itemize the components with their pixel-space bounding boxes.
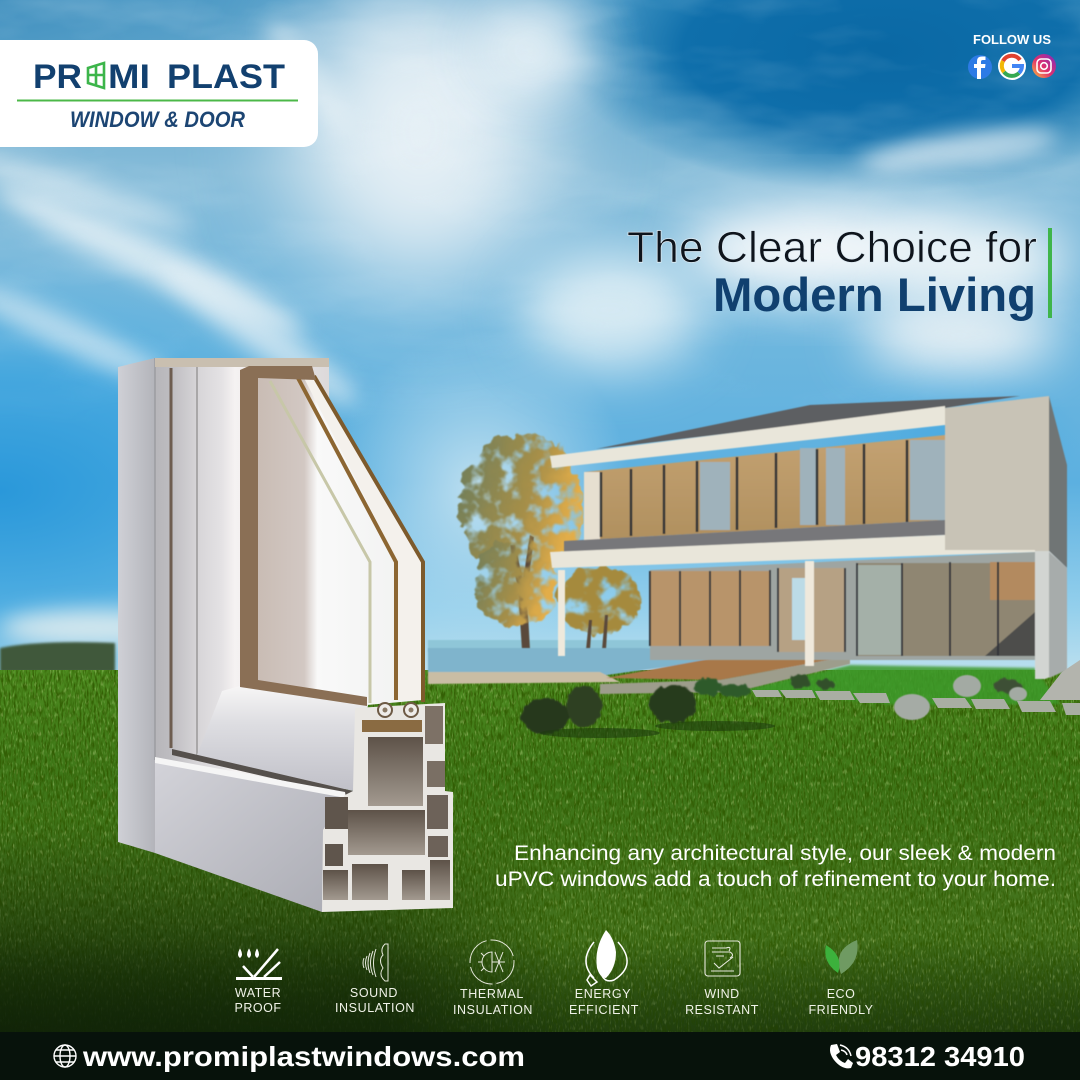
stone wall xyxy=(945,396,1049,551)
feature: eco friendly xyxy=(809,940,874,1017)
feature: thermal insulation: THERMAL xyxy=(460,987,524,1001)
social follow block xyxy=(968,33,1056,80)
columns xyxy=(558,561,814,666)
lower fascia xyxy=(550,535,1035,568)
pool and deck xyxy=(428,648,850,694)
main frame face xyxy=(155,358,345,795)
icon: instagram xyxy=(1032,54,1056,78)
glass panes xyxy=(258,376,423,705)
feature: wind resistant: WIND xyxy=(704,987,740,1001)
icon: sun and snowflake in circle xyxy=(470,940,514,984)
feature: sound insulation: SOUND xyxy=(350,986,398,1000)
sea horizon xyxy=(428,640,658,652)
icon: google xyxy=(998,52,1026,80)
tree behind house xyxy=(460,433,642,650)
feature: eco friendly: ECO xyxy=(827,987,855,1001)
feature: energy efficient xyxy=(569,930,639,1017)
icon: two green leaves xyxy=(825,940,858,974)
description text: uPVC windows add a touch of refinement to your home. xyxy=(495,867,1056,891)
icon: sound waves at wall xyxy=(363,944,388,981)
feature: water proof xyxy=(235,949,282,1015)
logo panel xyxy=(0,40,318,147)
garden shrubs and stepping stones xyxy=(521,660,1080,738)
sky background xyxy=(0,0,1080,690)
icon: globe xyxy=(54,1045,76,1067)
feature: energy efficient: ENERGY xyxy=(575,987,631,1001)
description text: Enhancing any architectural style, our sleek & modern xyxy=(514,841,1056,865)
description text xyxy=(495,841,1056,891)
brand name xyxy=(33,58,285,96)
green accent bar xyxy=(1048,228,1052,318)
feature: thermal insulation: INSULATION xyxy=(453,1003,533,1017)
brand name: PLAST xyxy=(167,58,285,96)
feature: wind resistant xyxy=(685,941,759,1017)
modern house xyxy=(550,396,1067,679)
icon: water drops and surface xyxy=(236,949,282,980)
icon: phone xyxy=(830,1044,853,1068)
feature: eco friendly: FRIENDLY xyxy=(809,1003,874,1017)
outer frame side xyxy=(118,358,155,853)
brand name: PR xyxy=(33,58,82,96)
headline xyxy=(627,223,1037,321)
headline: The Clear Choice for xyxy=(627,223,1037,272)
feature: sound insulation xyxy=(335,944,415,1015)
feature: water proof: WATER xyxy=(235,986,281,1000)
feature: sound insulation: INSULATION xyxy=(335,1001,415,1015)
footer bar xyxy=(0,1032,1080,1080)
distant tree line xyxy=(0,642,115,672)
icon: green window xyxy=(88,63,104,88)
website: www.promiplastwindows.com xyxy=(82,1041,525,1072)
icon: wind and checkmark box xyxy=(705,941,740,976)
headline: Modern Living xyxy=(713,268,1036,321)
top fascia xyxy=(550,406,945,468)
logo tagline: WINDOW & DOOR xyxy=(70,107,245,132)
upper floor glazing xyxy=(584,435,945,540)
grass lawn xyxy=(0,665,1080,1032)
feature: energy efficient: EFFICIENT xyxy=(569,1003,639,1017)
balcony band xyxy=(564,520,945,552)
brand name: MI xyxy=(108,58,150,96)
roof xyxy=(596,396,1020,449)
phone number: 98312 34910 xyxy=(855,1041,1025,1072)
feature: water proof: PROOF xyxy=(235,1001,281,1015)
section profile xyxy=(322,703,453,912)
feature: wind resistant: RESISTANT xyxy=(685,1003,759,1017)
lower floor glazing xyxy=(650,562,1035,656)
lower floor wall xyxy=(650,552,1035,660)
sill xyxy=(155,760,345,912)
feature: thermal insulation xyxy=(453,940,533,1017)
right side wall xyxy=(1049,396,1067,568)
inner bottom rail xyxy=(197,686,368,791)
icon: facebook xyxy=(968,55,992,79)
icon: white leaf with plug xyxy=(586,930,627,986)
brown glazing bead xyxy=(240,366,367,706)
upvc window profile xyxy=(118,358,453,912)
social follow block: FOLLOW US xyxy=(973,33,1051,47)
